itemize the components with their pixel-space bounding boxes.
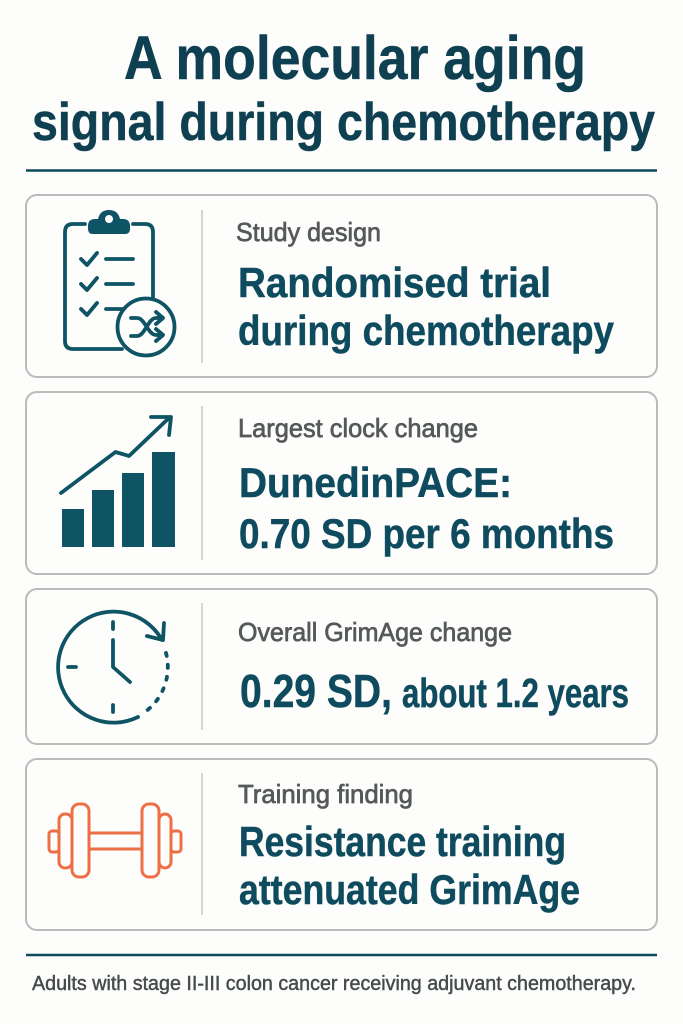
- panel: training finding: [26, 759, 657, 930]
- headline: resistance training: Resistance training: [239, 818, 566, 865]
- title: A molecular aging: [124, 24, 586, 92]
- label: largest clock change: Largest clock change: [238, 413, 478, 443]
- headline: DunedinPACE: [239, 459, 614, 557]
- headline: resistance training: [239, 818, 580, 913]
- headline: DunedinPACE: DunedinPACE:: [239, 459, 512, 506]
- label: overall GrimAge change: Overall GrimAge change: [238, 617, 512, 647]
- headline: DunedinPACE: 0.70 SD per 6 months: [239, 510, 614, 557]
- headline: randomised trial: during chemotherapy: [238, 307, 615, 354]
- panel: overall GrimAge change: [26, 589, 657, 744]
- headline: GrimAge value: [240, 665, 629, 717]
- footnote: Adults with stage II-III colon cancer receiving adjuvant chemotherapy.: [32, 973, 636, 995]
- panel: largest clock change: [26, 392, 657, 574]
- icon: dumbbell: [49, 804, 181, 877]
- icon: clipboard with shuffle: [65, 210, 174, 356]
- icon: rising bar chart: [61, 417, 175, 547]
- headline: randomised trial: Randomised trial: [238, 259, 551, 306]
- icon: clock with circular arrow: [58, 612, 168, 723]
- headline: resistance training: attenuated GrimAge: [239, 866, 580, 913]
- label: training finding: Training finding: [238, 779, 413, 809]
- label: study design: Study design: [236, 217, 381, 247]
- panel: study design: [26, 195, 657, 377]
- headline: GrimAge value: 0.29 SD,: [240, 665, 392, 717]
- headline: randomised trial: [238, 259, 615, 354]
- title: [32, 24, 655, 152]
